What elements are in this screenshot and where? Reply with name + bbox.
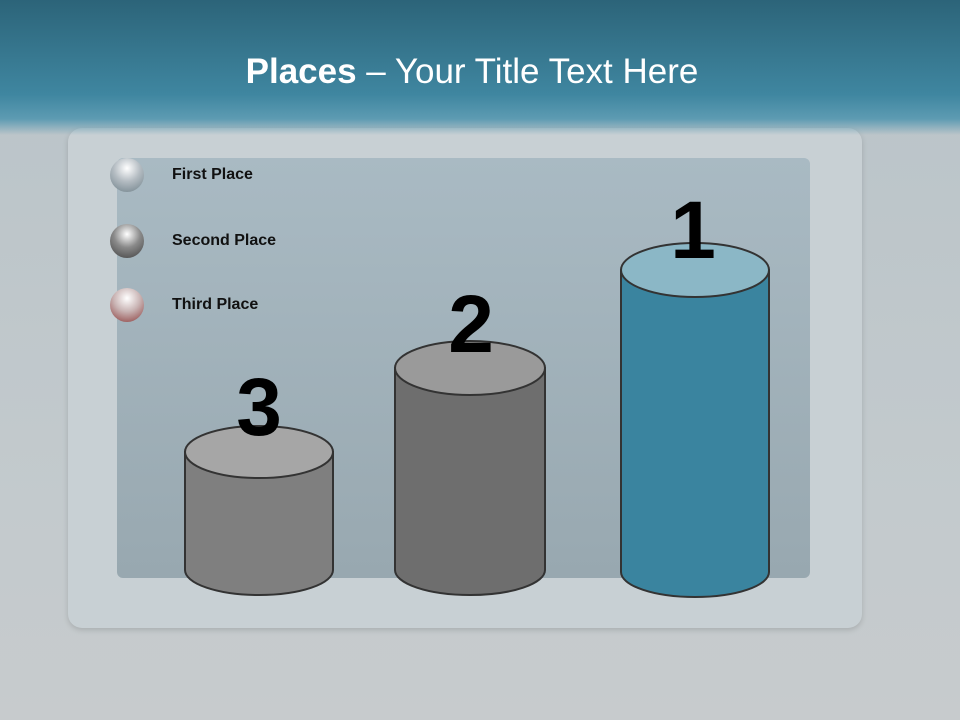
number 3: 3	[236, 362, 282, 453]
legend: First Place	[172, 166, 253, 183]
cylinder 1	[621, 243, 769, 597]
cylinder 2	[395, 341, 545, 595]
tablet screen	[117, 158, 810, 578]
legend: Third Place	[172, 296, 258, 313]
legend: Second Place	[172, 232, 276, 249]
legend	[110, 158, 276, 322]
title: Places – Your Title Text Here	[246, 52, 698, 91]
legend: first place	[110, 158, 253, 192]
legend: third place	[110, 288, 258, 322]
legend: second place	[110, 224, 276, 258]
tablet frame	[68, 128, 862, 628]
header bar	[0, 0, 960, 135]
number 2: 2	[448, 279, 494, 370]
number 1: 1	[670, 185, 716, 276]
cylinder 3	[185, 426, 333, 595]
